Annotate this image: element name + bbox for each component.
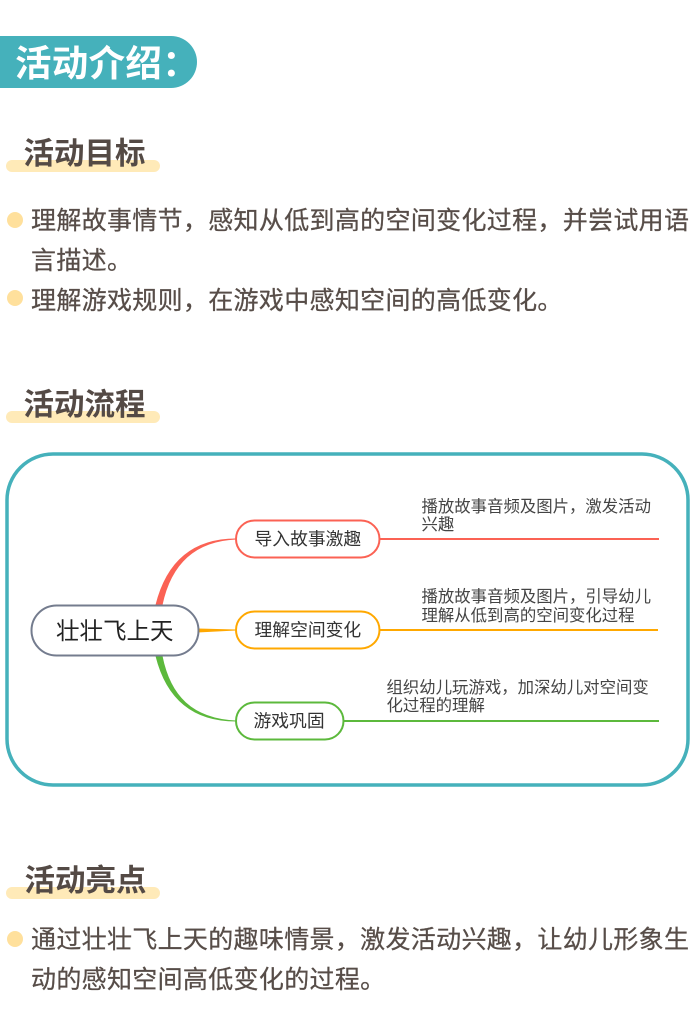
panel: mind map [5,452,690,787]
panel border [7,454,688,785]
heading: 活动目标: 活动目标 [24,137,146,171]
note: 游戏巩固: 组织幼儿玩游戏，加深幼儿对空间变 [386,679,649,697]
node: 导入故事激趣: 导入故事激趣 [254,529,361,549]
note: 游戏巩固: 化过程的理解 [386,697,485,715]
node: 理解空间变化 [236,612,380,648]
text: goal 2: 理解游戏规则，在游戏中感知空间的高低变化。 [31,287,563,315]
text: goal 1: 理解故事情节，感知从低到高的空间变化过程，并尝试用语 [31,207,689,235]
heading: 活动流程: 活动流程 [24,388,146,422]
bullet: highlight [7,931,23,947]
bullet: goal 2 [7,290,23,306]
root node: 壮壮飞上天 [56,618,174,644]
node: 游戏巩固 [236,702,344,740]
branch: red [156,539,659,605]
text: highlight [31,926,689,994]
bullet: goal 1 [7,212,23,228]
title text: 活动介绍： [15,43,199,84]
title banner [0,36,197,88]
note: 理解空间变化: 播放故事音频及图片，引导幼儿 [422,588,651,606]
text: goal 1 [31,207,689,275]
branch: orange [198,629,658,632]
note: 游戏巩固 [386,679,649,715]
root node [32,606,198,656]
note: 理解空间变化: 理解从低到高的空间变化过程 [422,607,635,625]
note: 导入故事激趣 [422,498,651,534]
node: 理解空间变化: 理解空间变化 [254,620,361,640]
text: highlight: 动的感知空间高低变化的过程。 [31,966,385,994]
heading: 活动亮点: 活动亮点 [24,864,146,898]
note: 导入故事激趣: 兴趣 [422,516,454,534]
text: highlight: 通过壮壮飞上天的趣味情景，激发活动兴趣，让幼儿形象生 [31,926,689,954]
node: 导入故事激趣 [236,520,380,558]
branch: green [156,656,659,721]
node: 游戏巩固: 游戏巩固 [254,711,325,731]
text: goal 1: 言描述。 [31,247,132,275]
note: 理解空间变化 [422,588,651,625]
note: 导入故事激趣: 播放故事音频及图片，激发活动 [422,498,651,516]
